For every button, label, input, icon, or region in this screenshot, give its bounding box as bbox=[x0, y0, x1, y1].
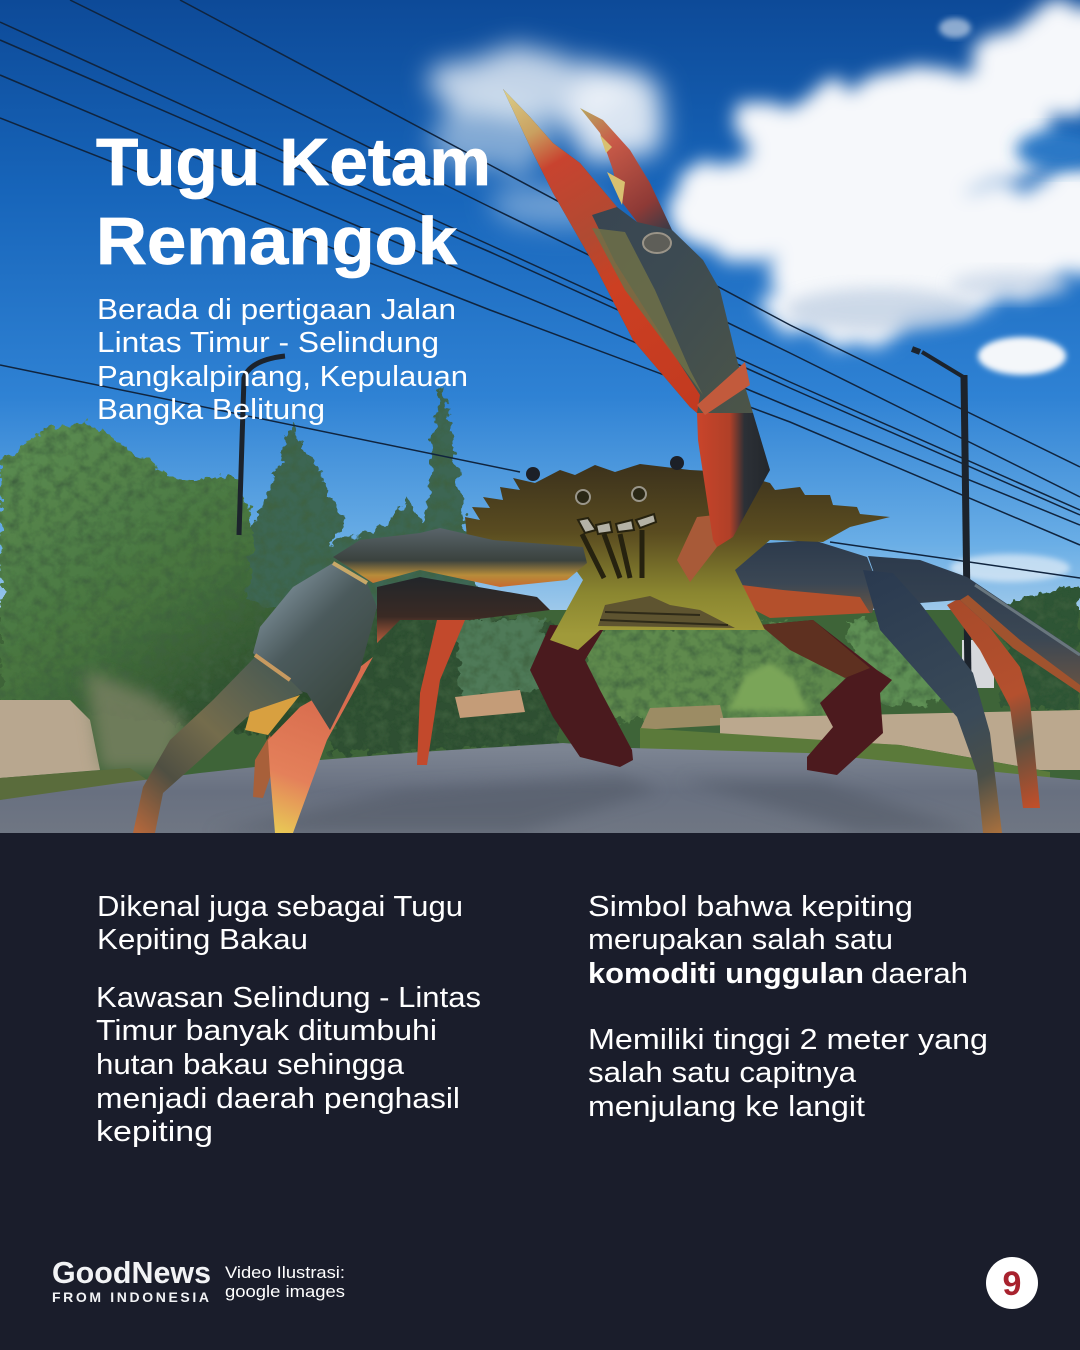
clouds bbox=[425, 0, 1080, 582]
right column: symbol: Simbol bahwa kepiting bbox=[588, 891, 913, 923]
right column: height bbox=[588, 1024, 988, 1123]
image credit bbox=[225, 1263, 345, 1301]
left column: mangrove area: kepiting bbox=[96, 1116, 213, 1148]
cloud shading bbox=[785, 288, 975, 332]
title: Tugu Ketam bbox=[96, 125, 491, 200]
plaza shadows bbox=[210, 775, 980, 833]
crab back legs bbox=[417, 620, 465, 765]
location text bbox=[97, 294, 468, 426]
power lines bbox=[0, 0, 1080, 578]
left column: mangrove area: menjadi daerah penghasil bbox=[96, 1083, 460, 1115]
left column: mangrove area: Timur banyak ditumbuhi bbox=[96, 1015, 437, 1047]
location text: Pangkalpinang, Kepulauan bbox=[97, 361, 468, 393]
crab right legs bbox=[947, 595, 1040, 808]
photo: crab monument bbox=[0, 0, 1080, 833]
tall grass bbox=[728, 662, 808, 712]
street lamps bbox=[239, 349, 968, 680]
logo: GoodNews from Indonesia: FROM INDONESIA bbox=[52, 1289, 209, 1305]
right column: symbol: daerah bbox=[871, 958, 968, 990]
white building bbox=[962, 640, 994, 688]
logo: GoodNews from Indonesia: GoodNews bbox=[52, 1255, 211, 1290]
left column: also known as: Kepiting Bakau bbox=[97, 924, 308, 956]
sandy ground bbox=[0, 700, 100, 778]
location text: Bangka Belitung bbox=[97, 394, 325, 426]
blue gap in cloud bbox=[1016, 130, 1080, 170]
right column: symbol bbox=[588, 891, 968, 990]
crab mouth plate bbox=[598, 596, 735, 628]
right column: height: Memiliki tinggi 2 meter yang bbox=[588, 1024, 988, 1056]
crab left claw arm bbox=[133, 528, 587, 833]
crab face bbox=[578, 514, 656, 534]
left column: also known as bbox=[97, 891, 463, 956]
right column: height: menjulang ke langit bbox=[588, 1091, 865, 1123]
title bbox=[96, 125, 491, 279]
crab carapace bbox=[465, 464, 890, 650]
page number badge: 9 bbox=[1003, 1265, 1021, 1303]
image credit: Video Ilustrasi: bbox=[225, 1263, 345, 1282]
right column: symbol: merupakan salah satu bbox=[588, 924, 893, 956]
logo: GoodNews from Indonesia bbox=[52, 1255, 211, 1305]
location text: Berada di pertigaan Jalan bbox=[97, 294, 456, 326]
location text: Lintas Timur - Selindung bbox=[97, 327, 439, 359]
image credit: google images bbox=[225, 1282, 345, 1301]
left column: also known as: Dikenal juga sebagai Tugu bbox=[97, 891, 463, 923]
right column: height: salah satu capitnya bbox=[588, 1057, 857, 1089]
title: Remangok bbox=[96, 204, 458, 279]
left column: mangrove area bbox=[96, 982, 481, 1148]
page number badge bbox=[986, 1257, 1038, 1309]
sky bbox=[0, 0, 1080, 640]
right column: symbol: komoditi unggulan bbox=[588, 958, 864, 990]
plaza bbox=[0, 743, 1080, 833]
left trees bbox=[0, 385, 1080, 755]
left column: mangrove area: hutan bakau sehingga bbox=[96, 1049, 405, 1081]
crab eyes bbox=[576, 487, 646, 504]
crab sculpture bbox=[133, 89, 1080, 833]
left column: mangrove area: Kawasan Selindung - Lintas bbox=[96, 982, 481, 1014]
distant forest bbox=[0, 610, 1080, 800]
crab raised claw bbox=[503, 89, 770, 582]
